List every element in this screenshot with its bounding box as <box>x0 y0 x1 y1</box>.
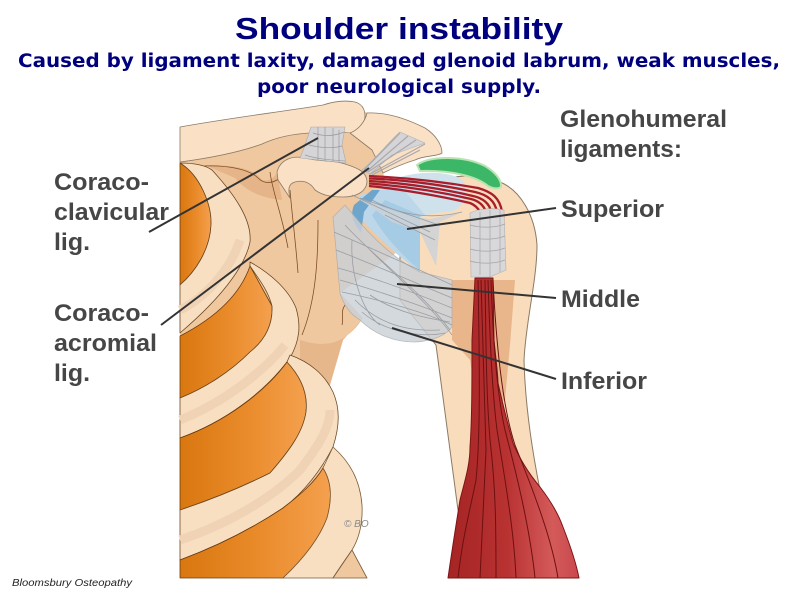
bicipital tendons <box>369 176 502 212</box>
middle ligament <box>334 225 452 335</box>
rib 2 <box>180 262 299 438</box>
coracoclavicular ligament <box>300 127 346 163</box>
copyright mark: © BO <box>344 519 369 530</box>
leader line: middle <box>397 284 556 298</box>
label: superior: Superior <box>561 196 664 223</box>
label: coraco-clavicular lig.: clavicular <box>54 199 169 226</box>
intercostal space 4 <box>180 468 330 578</box>
rib 3 <box>180 355 338 560</box>
label: coraco-acromial lig. <box>54 300 157 387</box>
label: middle: Middle <box>561 286 640 313</box>
transverse humeral ligament <box>470 209 506 277</box>
label: coraco-acromial lig.: lig. <box>54 360 90 387</box>
capsule and inferior ligament <box>333 205 452 342</box>
label: inferior: Inferior <box>561 368 647 395</box>
leader line: inferior <box>392 328 556 379</box>
superior ligament <box>352 195 462 266</box>
label: coraco-acromial lig.: acromial <box>54 330 157 357</box>
heading: glenohumeral ligaments: Glenohumeral <box>560 106 727 133</box>
humerus <box>400 176 540 510</box>
rib shading <box>180 240 330 540</box>
biceps muscle <box>448 278 579 578</box>
label: coraco-clavicular lig.: Coraco- <box>54 169 149 196</box>
intercostal space 2 <box>180 266 272 398</box>
rib 1 <box>180 163 250 333</box>
subtitle: poor neurological supply. <box>257 77 541 98</box>
glenoid labrum <box>417 158 501 189</box>
thorax and scapula base <box>180 106 400 578</box>
intercostal space 3 <box>180 362 306 510</box>
rib 4 <box>283 447 362 578</box>
lower scapula fragment <box>333 550 367 578</box>
acromion <box>350 113 442 173</box>
subtitle: Caused by ligament laxity, damaged glenoid labrum, weak muscles, <box>18 51 780 72</box>
heading: glenohumeral ligaments <box>560 106 727 163</box>
scapular spine strip <box>262 133 367 160</box>
coracoid process <box>277 157 367 198</box>
leader line: coracoacromial <box>161 168 369 325</box>
scapula shading <box>205 165 282 200</box>
subtitle <box>18 51 780 98</box>
anatomy illustration <box>180 101 579 578</box>
credit: Bloomsbury Osteopathy <box>12 578 133 589</box>
title: Shoulder instability <box>235 11 564 46</box>
heading: glenohumeral ligaments: ligaments: <box>560 136 682 163</box>
humeral head and glenoid <box>352 173 466 272</box>
label: coraco-clavicular lig. <box>54 169 169 256</box>
inner bone outlines <box>204 166 345 335</box>
intercostal space 1 <box>180 163 211 285</box>
label: coraco-clavicular lig.: lig. <box>54 229 90 256</box>
coracoacromial ligament <box>362 132 425 175</box>
leader line: coracoclavicular <box>149 138 318 232</box>
humeral shaft shadow <box>452 280 515 410</box>
leader line: superior <box>407 208 556 229</box>
label: coraco-acromial lig.: Coraco- <box>54 300 149 327</box>
greater tuberosity <box>420 212 476 275</box>
clavicle <box>180 101 365 162</box>
